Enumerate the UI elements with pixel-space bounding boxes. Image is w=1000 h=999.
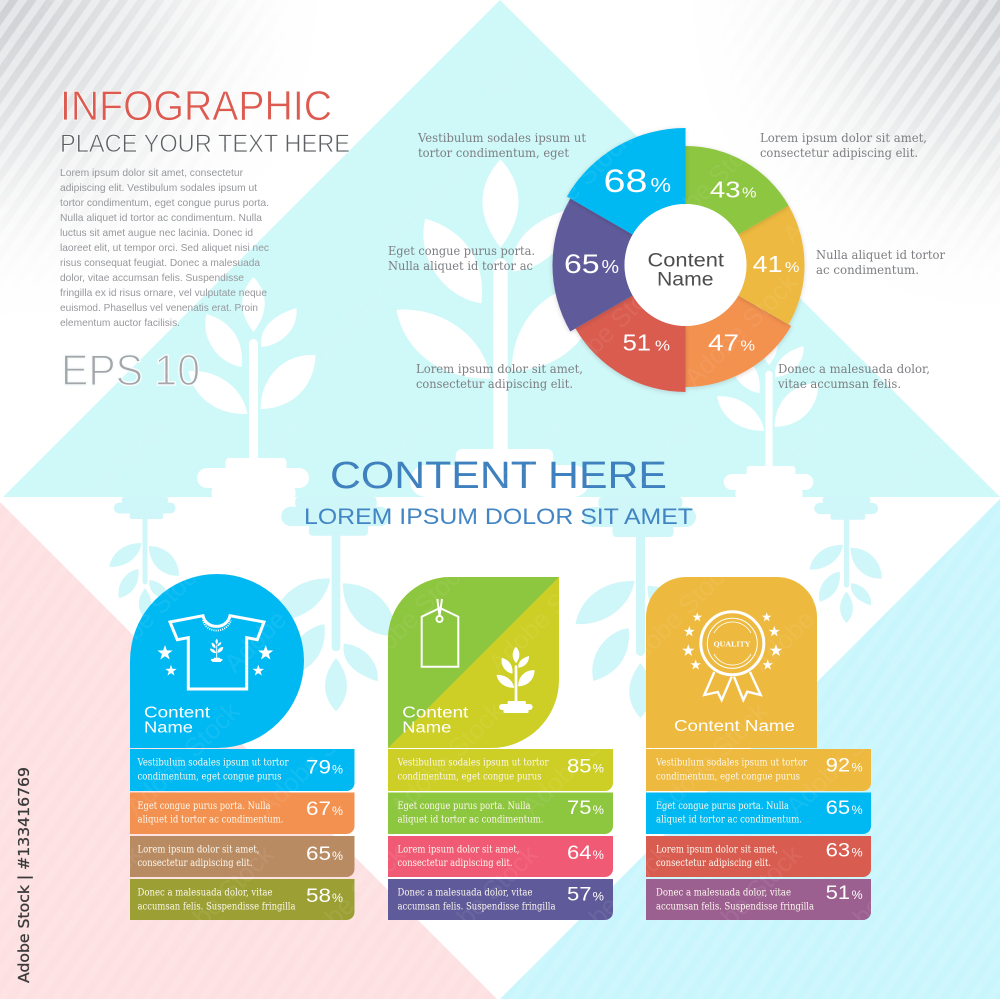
value 68%: % [650, 175, 671, 197]
value 47%: % [740, 338, 755, 355]
row: 63%: 63 [826, 841, 850, 862]
value 51%: % [655, 338, 670, 355]
watermark pattern: Adobe Stock [18, 266, 144, 392]
card diagonal green [388, 577, 559, 748]
row: 75%: % [593, 803, 604, 817]
watermark pattern: Adobe Stock [776, 123, 902, 249]
vertical stock id label: Adobe Stock | #133416769 [15, 767, 33, 983]
card label [402, 705, 469, 737]
callout: left: Nulla aliquet id tortor ac [388, 258, 533, 273]
callout: top left: Vestibulum sodales ipsum ut [417, 130, 586, 145]
segment 65% [552, 198, 633, 332]
segment 47% [686, 296, 791, 387]
watermark pattern: Adobe Stock [154, 838, 280, 964]
value 41% [753, 251, 799, 277]
icon: plant [496, 647, 535, 713]
row: 67%: Eget congue purus porta. Nulla [138, 801, 271, 812]
card label: Content [144, 705, 211, 722]
background: faint stripes over bottom triangles [0, 500, 1000, 999]
row: 58%: 58 [306, 886, 331, 907]
icon: quality badge [682, 612, 782, 700]
watermark pattern: Adobe Stock [512, 123, 638, 249]
plant: inverted cyan far right [809, 497, 882, 623]
rows: column 3 [646, 749, 871, 920]
value 65%: 65 [564, 249, 600, 279]
row: 57%: 57 [567, 885, 592, 906]
row: 63% [646, 836, 871, 877]
row: 51%: Donec a malesuada dolor, vitae [656, 888, 791, 899]
row: 63%: % [852, 846, 863, 860]
row: 65%: 65 [826, 798, 850, 819]
watermark pattern: Adobe Stock [482, 552, 608, 678]
body paragraph: Lorem ipsum dolor sit amet, consectetur [60, 167, 243, 179]
row: 92%: % [852, 761, 863, 775]
plant: inverted cyan far left [109, 497, 179, 619]
callout: right: ac condimentum. [816, 262, 919, 277]
row: 79% [130, 749, 354, 791]
body paragraph: dolor, vitae accumsan felis. Suspendisse [60, 272, 244, 284]
centre label: Content [648, 250, 725, 272]
watermark pattern: Adobe Stock [248, 123, 374, 249]
segment 43% [686, 146, 789, 234]
background: cyan diamond top half [3, 0, 1000, 497]
row: 51%: 51 [826, 883, 850, 904]
body paragraph: adipiscing elit. Vestibulum sodales ipsum ut [60, 182, 257, 194]
watermark pattern: Adobe Stock [218, 552, 344, 678]
callout: bottom right: vitae accumsan felis. [777, 376, 901, 391]
row: 57%: accumsan felis. Suspendisse fringilla [398, 901, 556, 912]
row: 51% [646, 879, 871, 920]
subheading: LOREM IPSUM DOLOR SIT AMET [304, 504, 693, 529]
row: 58%: % [332, 891, 343, 905]
row: 92%: Vestibulum sodales ipsum ut tortor [655, 758, 807, 769]
row: 58%: Donec a malesuada dolor, vitae [138, 888, 273, 899]
row: 75%: aliquet id tortor ac condimentum. [398, 815, 544, 826]
watermark pattern: Adobe Stock [380, 123, 506, 249]
centre hole [624, 204, 746, 326]
rows: column 2 [388, 749, 613, 920]
donut callouts [388, 130, 945, 391]
watermark pattern: Adobe Stock [810, 266, 936, 392]
watermark pattern: Adobe Stock [252, 695, 378, 821]
heading: CONTENT HERE: CONTENT HERE [330, 455, 667, 497]
title: INFOGRAPHIC: INFOGRAPHIC [60, 82, 332, 129]
plant: white right [717, 321, 819, 498]
row: 67%: aliquet id tortor ac condimentum. [138, 815, 284, 826]
watermark pattern: Adobe Stock [286, 838, 412, 964]
watermark pattern: Adobe Stock [350, 552, 476, 678]
callout: top right: consectetur adipiscing elit. [760, 145, 918, 160]
watermark pattern: Adobe Stock [746, 552, 872, 678]
row: 57%: % [593, 890, 604, 904]
value 43%: 43 [710, 176, 740, 202]
body paragraph: risus consequat feugiat. Donec a malesuada [60, 257, 260, 269]
row: 65%: Eget congue purus porta. Nulla [656, 801, 789, 812]
row: 51%: % [852, 888, 863, 902]
plant: white centre [396, 159, 600, 513]
row: 64%: consectetur adipiscing elit. [398, 858, 512, 869]
centre label: Name [657, 270, 714, 290]
value 65% [564, 249, 619, 279]
body paragraph: Nulla aliquet id tortor ac condimentum. Nulla [60, 212, 262, 224]
segment 68% [567, 128, 686, 234]
icon: t-shirt [157, 616, 273, 689]
card label: Name [144, 720, 193, 737]
row: 79%: condimentum, eget congue purus [138, 771, 282, 782]
centre label [648, 250, 725, 290]
row: 63%: Lorem ipsum dolor sit amet, [656, 844, 778, 855]
row: 64%: 64 [567, 843, 592, 864]
watermark pattern: Adobe Stock [52, 409, 178, 535]
title block [60, 82, 350, 395]
row: 85% [388, 749, 613, 791]
segment 51% [576, 296, 686, 392]
row: 65%: aliquet id tortor ac condimentum. [656, 815, 802, 826]
row: 92% [646, 749, 871, 791]
row: 58%: accumsan felis. Suspendisse fringilla [138, 901, 296, 912]
watermark pattern: Adobe Stock [780, 695, 906, 821]
row: 65%: Lorem ipsum dolor sit amet, [138, 844, 260, 855]
value 47% [708, 330, 755, 356]
watermark pattern: Adobe Stock [116, 123, 242, 249]
callout: bottom left: consectetur adipiscing elit. [416, 376, 573, 391]
body paragraph: laoreet elit, ut tempor orci. Sed aliquet nisi nec [60, 242, 269, 254]
plant: inverted cyan mid left [273, 497, 396, 711]
row: 65%: 65 [306, 844, 331, 865]
watermark pattern: Adobe Stock [448, 409, 574, 535]
watermark pattern: Adobe Stock [86, 552, 212, 678]
row: 85%: 85 [567, 757, 592, 778]
value 68% [604, 163, 671, 199]
watermark pattern: Adobe Stock [316, 409, 442, 535]
value 51% [623, 330, 670, 356]
row: 64%: % [593, 848, 604, 862]
watermark pattern: Adobe Stock [712, 409, 838, 535]
icon: quality badge: QUALITY [714, 640, 751, 648]
row: 57% [388, 879, 613, 920]
subtitle: PLACE YOUR TEXT HERE [60, 130, 350, 158]
callout: bottom left: Lorem ipsum dolor sit amet, [416, 361, 583, 376]
row: 64%: Lorem ipsum dolor sit amet, [398, 844, 520, 855]
watermark pattern: Adobe Stock [516, 695, 642, 821]
card label: Content Name [674, 718, 795, 735]
background: light blue triangle bottom right [500, 499, 1000, 999]
card label: Name [402, 720, 451, 737]
donut chart [552, 128, 805, 392]
value 51%: 51 [623, 330, 651, 356]
body paragraph: luctus sit amet augue nec lacinia. Donec id [60, 227, 253, 239]
watermark pattern: Adobe Stock [418, 838, 544, 964]
callout: bottom right: Donec a malesuada dolor, [778, 361, 930, 376]
row: 63%: consectetur adipiscing elit. [656, 858, 771, 869]
background: pink triangle bottom left [0, 502, 497, 999]
row: 65%: % [852, 803, 863, 817]
callout: top left [417, 130, 586, 160]
watermark pattern: Adobe Stock [546, 266, 672, 392]
watermark pattern: Adobe Stock [678, 266, 804, 392]
callout: bottom left [416, 361, 583, 391]
value 41%: 41 [753, 251, 782, 277]
row: 75%: Eget congue purus porta. Nulla [398, 801, 531, 812]
watermark pattern: Adobe Stock [120, 695, 246, 821]
watermark pattern: Adobe Stock [22, 838, 148, 964]
watermark pattern: Adobe Stock [614, 552, 740, 678]
rows: column 1 [130, 749, 354, 920]
row: 79%: Vestibulum sodales ipsum ut tortor [137, 758, 289, 769]
plant: inverted cyan mid right [576, 497, 702, 718]
panel: blue t-shirt card [130, 574, 304, 748]
card label [144, 705, 211, 737]
row: 85%: % [593, 762, 604, 776]
row: 67% [130, 792, 354, 834]
row: 64% [388, 836, 613, 877]
watermark pattern: Adobe Stock [648, 695, 774, 821]
row: 85%: Vestibulum sodales ipsum ut tortor [397, 758, 549, 769]
row: 65%: % [332, 849, 343, 863]
row: 92%: condimentum, eget congue purus [656, 771, 800, 782]
value 43% [710, 176, 756, 202]
callout: right [816, 247, 945, 277]
panel: green tag card [388, 577, 559, 748]
row: 51%: accumsan felis. Suspendisse fringilla [656, 901, 814, 912]
body paragraph [60, 167, 269, 329]
card shape [646, 577, 817, 748]
row: 58% [130, 879, 354, 920]
icon: price tag [422, 599, 458, 667]
row: 75% [388, 792, 613, 834]
card shape [130, 574, 304, 748]
callout: top right [760, 130, 927, 160]
callout: top left: tortor condimentum, eget [418, 145, 569, 160]
row: 75%: 75 [567, 798, 592, 819]
watermark pattern: Adobe Stock [644, 123, 770, 249]
row: 65% [646, 792, 871, 834]
watermark pattern: Adobe Stock [580, 409, 706, 535]
watermark pattern: Adobe Stock [844, 409, 970, 535]
callout: right: Nulla aliquet id tortor [816, 247, 945, 262]
callout: left: Eget congue purus porta. [388, 243, 535, 258]
watermark pattern: Adobe Stock [282, 266, 408, 392]
segment 41% [738, 206, 805, 324]
row: 67%: % [332, 804, 343, 818]
value 65%: % [602, 257, 619, 277]
row: 85%: condimentum, eget congue purus [398, 771, 542, 782]
watermark pattern: Adobe Stock [878, 552, 1000, 678]
white band below the diamond [200, 497, 800, 515]
watermark pattern: Adobe Stock [184, 409, 310, 535]
value 68%: 68 [604, 163, 648, 199]
row: 57%: Donec a malesuada dolor, vitae [398, 888, 533, 899]
watermark pattern: Adobe Stock [550, 838, 676, 964]
body paragraph: euismod. Phasellus vel venenatis erat. Proin [60, 302, 258, 314]
card base yellow-green [388, 577, 559, 748]
value 41%: % [785, 259, 799, 276]
EPS 10 label: EPS 10 [61, 346, 200, 395]
callout: top right: Lorem ipsum dolor sit amet, [760, 130, 927, 145]
body paragraph: elementum auctor facilisis. [60, 317, 180, 329]
value 43%: % [742, 184, 756, 202]
plant: white left [188, 277, 316, 498]
row: 67%: 67 [306, 799, 331, 820]
row: 92%: 92 [826, 756, 850, 777]
body paragraph: fringilla ex id risus ornare, vel vulputate neque [60, 287, 267, 299]
panel: yellow quality card [646, 577, 817, 748]
value 47%: 47 [708, 330, 739, 356]
row: 79%: 79 [306, 757, 331, 778]
watermark pattern: Adobe Stock [682, 838, 808, 964]
callout: bottom right [777, 361, 930, 391]
callout: left [388, 243, 535, 273]
watermark pattern: Adobe Stock [384, 695, 510, 821]
watermark pattern: Adobe Stock [414, 266, 540, 392]
row: 65%: consectetur adipiscing elit. [138, 858, 252, 869]
card label: Content [402, 705, 469, 722]
watermark pattern: Adobe Stock [150, 266, 276, 392]
row: 79%: % [332, 762, 343, 776]
watermark pattern: Adobe Stock [814, 838, 940, 964]
row: 65% [130, 836, 354, 877]
body paragraph: tortor condimentum, eget congue purus porta. [60, 197, 269, 209]
